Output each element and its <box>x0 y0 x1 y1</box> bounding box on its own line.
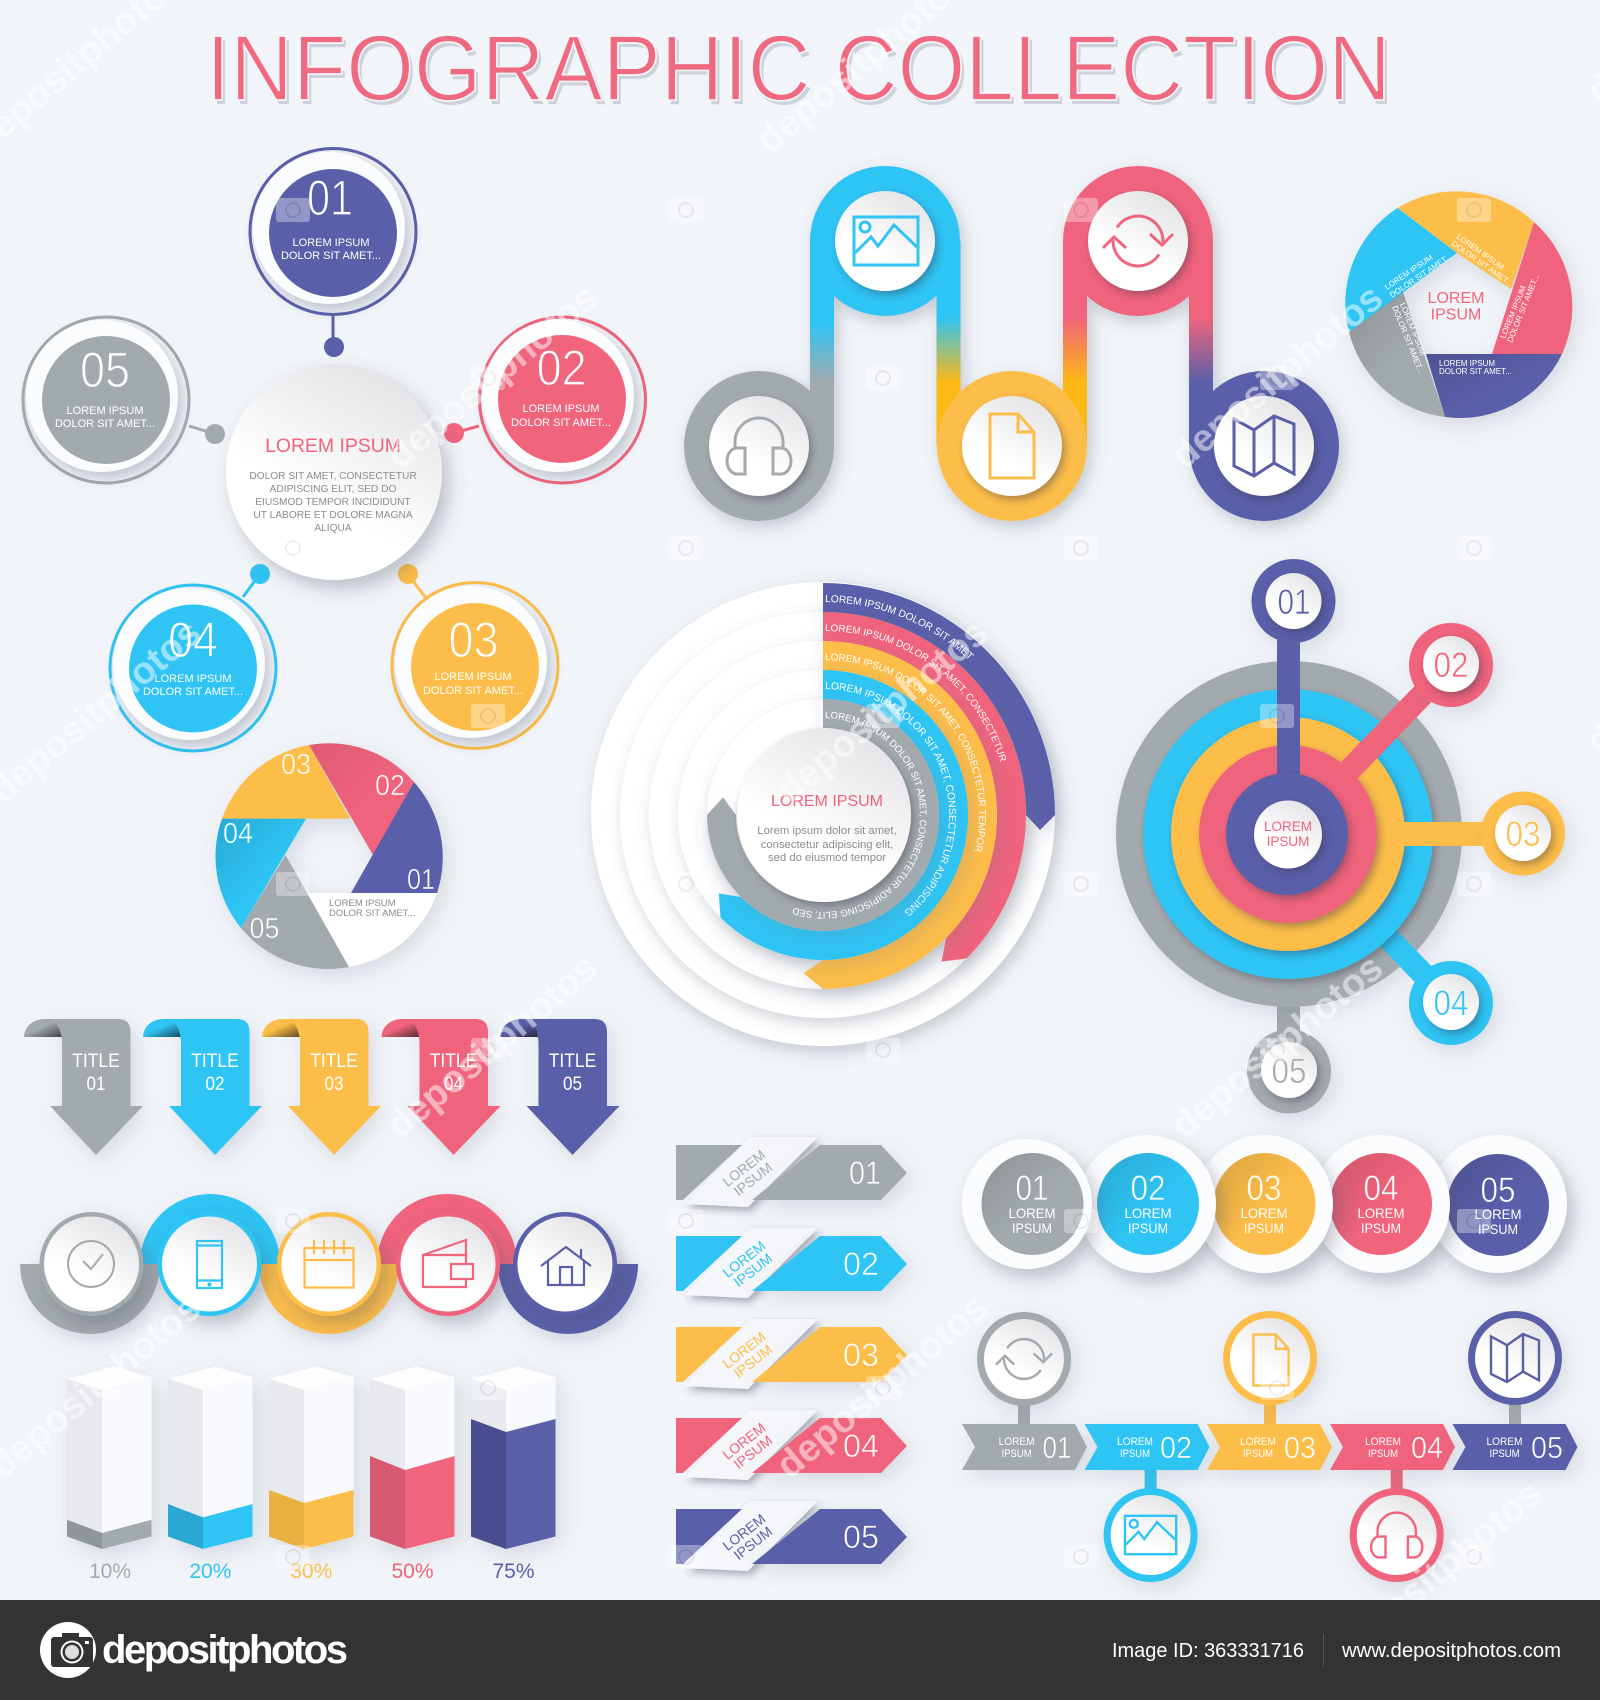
panel: aperture pie chart: DOLOR SIT AMET... <box>329 908 415 919</box>
pink node refresh <box>1088 191 1188 291</box>
chevron 05 <box>1452 1424 1578 1470</box>
panel: target diagram with five nodes <box>1116 559 1565 1114</box>
central circle: UT LABORE ET DOLORE MAGNA <box>253 510 413 521</box>
center label <box>1254 800 1322 868</box>
circle 01 <box>962 1139 1092 1269</box>
panel: pentagon pie chart: LOREM IPSUM <box>1499 284 1528 340</box>
circle 02 <box>1078 1135 1216 1273</box>
step 02 circle: DOLOR SIT AMET... <box>511 417 611 429</box>
ribbon 02: IPSUM <box>731 1250 775 1290</box>
ribbon 02: 02 <box>843 1246 879 1282</box>
step 04 circle: DOLOR SIT AMET... <box>143 686 243 698</box>
circle 04 <box>1312 1135 1450 1273</box>
yellow node document <box>962 396 1062 496</box>
cyan arc: LOREM IPSUM DOLOR SIT AMET, CONSECTETUR ADIPISCING <box>826 682 956 916</box>
chevron 01 <box>962 1424 1087 1470</box>
ribbon 01: LOREM <box>719 1146 768 1190</box>
cyan arc <box>718 670 978 972</box>
arrow 03: TITLE <box>310 1051 358 1072</box>
central circle <box>226 364 442 580</box>
central circle: ALIQUA <box>314 523 352 534</box>
cyan node image <box>835 191 935 291</box>
watermark text: depositphotos <box>769 1287 996 1487</box>
panel: aperture pie chart: 02 <box>375 770 405 802</box>
clock icon circle <box>40 1212 144 1316</box>
arrow 04: TITLE <box>430 1051 477 1072</box>
ribbon 03: IPSUM <box>731 1341 775 1381</box>
central circle: LOREM IPSUM <box>265 435 401 457</box>
pink arc: LOREM IPSUM DOLOR SIT AMET, CONSECTETUR <box>826 624 1006 762</box>
step 03 circle <box>392 564 558 748</box>
step 01 circle: DOLOR SIT AMET... <box>281 250 381 262</box>
panel: linked icon circles <box>20 1194 638 1334</box>
node 05 map <box>1468 1311 1562 1426</box>
ribbon 04: 04 <box>843 1428 879 1464</box>
ribbon 04: IPSUM <box>731 1432 775 1472</box>
yellow arc: LOREM IPSUM DOLOR SIT AMET, CONSECTETUR TEMPOR <box>826 653 986 852</box>
arrow 01: TITLE <box>72 1051 120 1072</box>
panel: pentagon pie chart: DOLOR SIT AMET... <box>1506 273 1541 344</box>
ribbon 04: LOREM <box>719 1419 768 1463</box>
panel: aperture pie chart: LOREM IPSUM <box>329 898 396 909</box>
panel: pentagon pie chart: LOREM IPSUM <box>1455 232 1506 272</box>
cyan layer and node 04: 04 <box>1434 984 1468 1023</box>
arrow 03 <box>262 1019 381 1155</box>
step 04 circle: 04 <box>168 612 218 668</box>
gray node headphones <box>709 396 809 496</box>
ribbon 03: LOREM <box>719 1328 768 1372</box>
circle 03: LOREM <box>1240 1205 1288 1221</box>
house icon circle <box>513 1212 617 1316</box>
step 05 circle: 05 <box>80 342 130 398</box>
chevron 01: LOREM <box>999 1436 1035 1448</box>
ribbon 01 <box>676 1137 907 1207</box>
chevron 02: IPSUM <box>1120 1448 1150 1460</box>
panel: pentagon pie chart: IPSUM <box>1431 306 1481 324</box>
node 03 document <box>1223 1311 1317 1426</box>
arrow 02: TITLE <box>191 1051 239 1072</box>
ribbon 03 <box>676 1319 907 1389</box>
watermark text: depositphotos <box>379 277 606 477</box>
arrow 03: 03 <box>324 1074 344 1095</box>
chevron 01: IPSUM <box>1002 1448 1032 1460</box>
arrow 02 <box>143 1019 262 1155</box>
panel: radial five step diagram <box>23 148 646 751</box>
white stacked discs <box>591 582 1055 1046</box>
title: INFOGRAPHIC COLLECTION <box>209 20 1394 124</box>
circle 01: LOREM <box>1008 1205 1056 1221</box>
central circle: ADIPISCING ELIT, SED DO <box>270 484 396 495</box>
panel: pentagon pie chart: LOREM IPSUM <box>1383 253 1435 292</box>
arrow 01: 01 <box>86 1074 106 1095</box>
step 02 circle <box>444 317 646 483</box>
watermark camera marks <box>276 198 1491 1569</box>
panel: title arrows <box>24 1019 620 1155</box>
panel: overlapping number circles <box>962 1135 1567 1273</box>
circle 04: IPSUM <box>1361 1220 1401 1236</box>
icon: depositphotos logo camera <box>40 1622 96 1678</box>
panel: concentric progress rings <box>588 576 1071 1059</box>
arrow 05: 05 <box>563 1074 582 1095</box>
ribbon 02 <box>676 1228 907 1298</box>
step 03 circle: LOREM IPSUM <box>434 671 512 683</box>
ribbon 05: 05 <box>843 1519 879 1555</box>
arrow 04 <box>382 1019 500 1155</box>
ribbon 05: IPSUM <box>731 1523 775 1563</box>
navy layer and node 01 <box>1226 559 1348 895</box>
chevron 03: LOREM <box>1240 1436 1276 1448</box>
bar 75% <box>471 1367 556 1583</box>
step 05 circle: LOREM IPSUM <box>66 405 144 417</box>
node 01 refresh <box>977 1312 1071 1426</box>
chevron 05: LOREM <box>1486 1436 1522 1448</box>
circle 05: LOREM <box>1474 1206 1522 1222</box>
ribbon 02: LOREM <box>719 1237 768 1281</box>
panel: pentagon pie chart <box>1345 191 1572 418</box>
panel: ribbon tags <box>676 1137 907 1571</box>
circle 03: IPSUM <box>1244 1220 1284 1236</box>
footer image id: Image ID: 363331716 <box>1112 1640 1304 1662</box>
watermark text: depositphotos <box>769 612 996 812</box>
navy node map <box>1214 396 1314 496</box>
panel: pentagon pie chart: LOREM IPSUM <box>1398 301 1428 357</box>
chevron 04: LOREM <box>1365 1436 1401 1448</box>
circle 02: 02 <box>1130 1169 1166 1208</box>
navy arc: LOREM IPSUM DOLOR SIT AMET <box>826 595 974 659</box>
arrow 05 <box>500 1019 620 1155</box>
step 01 circle <box>250 148 416 357</box>
yellow layer and node 03: 03 <box>1506 815 1540 854</box>
chevron 04 <box>1330 1424 1455 1470</box>
step 04 circle <box>110 564 276 751</box>
central circle: DOLOR SIT AMET, CONSECTETUR <box>249 471 417 482</box>
chevron 04: IPSUM <box>1368 1448 1398 1460</box>
circle 02: IPSUM <box>1128 1220 1168 1236</box>
bar 10% <box>67 1367 152 1583</box>
ribbon 03: 03 <box>843 1337 879 1373</box>
circle 05: IPSUM <box>1478 1221 1518 1237</box>
footer bar <box>0 1600 1600 1700</box>
chevron 05: IPSUM <box>1490 1448 1520 1460</box>
chevron 04: 04 <box>1411 1430 1443 1465</box>
panel: pentagon pie chart: LOREM <box>1428 290 1484 307</box>
panel: aperture pie chart: 01 <box>407 864 435 896</box>
node 04 headphones <box>1350 1468 1444 1582</box>
chevron 02: LOREM <box>1117 1436 1153 1448</box>
bar 20% <box>168 1367 252 1583</box>
circle 01: IPSUM <box>1012 1220 1052 1236</box>
chevron 01: 01 <box>1042 1430 1072 1465</box>
step 01 circle: LOREM IPSUM <box>292 237 370 249</box>
arrow 02: 02 <box>206 1074 224 1095</box>
step 03 circle: DOLOR SIT AMET... <box>423 685 523 697</box>
center disc: Lorem ipsum dolor sit amet, <box>757 825 897 837</box>
chevron 03: IPSUM <box>1243 1448 1273 1460</box>
pink layer and node 02: 02 <box>1434 646 1468 685</box>
calendar icon circle <box>277 1212 381 1316</box>
center disc: consectetur adipiscing elit, <box>761 839 893 851</box>
panel: snake path with icons <box>684 166 1339 521</box>
chevron 03: 03 <box>1284 1430 1316 1465</box>
navy layer and node 01: 01 <box>1278 583 1310 622</box>
arrow 04: 04 <box>444 1074 463 1095</box>
step 03 circle: 03 <box>448 612 498 668</box>
bar 50% <box>370 1367 454 1583</box>
arrow 05: TITLE <box>549 1051 596 1072</box>
circle 05 <box>1429 1135 1567 1273</box>
bar 30%: 30% <box>290 1560 332 1583</box>
watermark text: depositphotos <box>379 947 606 1147</box>
ribbon 01: 01 <box>849 1155 881 1191</box>
chevron 05: 05 <box>1531 1430 1563 1465</box>
gray arc <box>707 699 950 940</box>
gray layer and node 05: 05 <box>1272 1052 1306 1091</box>
yellow layer and node 03 <box>1171 717 1565 951</box>
circle 02: LOREM <box>1124 1205 1172 1221</box>
bar 20%: 20% <box>189 1560 231 1583</box>
center label: IPSUM <box>1267 834 1309 849</box>
node 02 image <box>1104 1468 1198 1582</box>
chevron 03 <box>1207 1424 1332 1470</box>
bar 50%: 50% <box>391 1560 434 1583</box>
step 04 circle: LOREM IPSUM <box>154 673 232 685</box>
panel: pentagon pie chart: DOLOR SIT AMET... <box>1390 304 1426 375</box>
circle 04: 04 <box>1364 1169 1398 1208</box>
circle 01: 01 <box>1016 1169 1048 1208</box>
gray arc: LOREM IPSUM DOLOR SIT AMET, CONSECTETUR ADIPISCING ELIT, SED <box>792 712 927 919</box>
phone icon circle <box>158 1212 262 1316</box>
navy arc <box>823 583 1064 836</box>
bar 10%: 10% <box>89 1560 131 1583</box>
panel: pentagon pie chart: DOLOR SIT AMET... <box>1450 239 1515 288</box>
ribbon 05: LOREM <box>719 1510 768 1554</box>
chevron 02 <box>1084 1424 1210 1470</box>
footer separator <box>1323 1634 1324 1667</box>
step 02 circle: 02 <box>537 340 587 396</box>
ribbon 05 <box>676 1501 907 1571</box>
center disc: sed do eiusmod tempor <box>768 852 886 864</box>
yellow arc <box>804 641 1007 1000</box>
half discs <box>20 1194 638 1334</box>
step 05 circle <box>23 317 225 483</box>
circle 03 <box>1195 1135 1333 1273</box>
circle 03: 03 <box>1246 1169 1282 1208</box>
panel: pentagon pie chart: LOREM IPSUM <box>1439 359 1495 368</box>
ribbon 01: IPSUM <box>731 1159 775 1199</box>
circle 04: LOREM <box>1358 1205 1404 1221</box>
panel: pentagon pie chart: DOLOR SIT AMET... <box>1388 252 1453 300</box>
connected ribbon silhouette <box>684 166 1339 521</box>
pink arc <box>823 612 1036 970</box>
arrow 01 <box>24 1019 143 1155</box>
step 02 circle: LOREM IPSUM <box>522 403 600 415</box>
bar 75%: 75% <box>492 1560 535 1583</box>
panel: pentagon pie chart: DOLOR SIT AMET... <box>1439 367 1512 376</box>
central circle: EIUSMOD TEMPOR INCIDIDUNT <box>255 497 411 508</box>
circle 05: 05 <box>1480 1171 1516 1210</box>
ribbon 04 <box>676 1410 907 1480</box>
center label: LOREM <box>1264 819 1312 834</box>
gray layer and node 05 <box>1116 661 1462 1114</box>
cyan layer and node 04 <box>1143 689 1493 1045</box>
step 05 circle: DOLOR SIT AMET... <box>55 418 155 430</box>
step 01 circle: 01 <box>307 170 353 226</box>
bar 30% <box>269 1367 354 1583</box>
center disc <box>737 728 911 902</box>
footer url: www.depositphotos.com <box>1341 1640 1561 1662</box>
panel: aperture pie chart: 04 <box>223 818 253 850</box>
panel: 3D bar chart <box>67 1367 556 1583</box>
watermark text: depositphotos <box>1323 1473 1550 1673</box>
panel: aperture pie chart: 05 <box>250 913 280 945</box>
watermark text: depositphotos <box>1164 947 1391 1147</box>
wallet icon circle <box>396 1212 500 1316</box>
panel: chevron timeline with icon nodes <box>962 1311 1578 1582</box>
chevron 02: 02 <box>1160 1430 1192 1465</box>
panel: aperture pie chart: 03 <box>281 749 311 781</box>
center disc: LOREM IPSUM <box>771 793 883 810</box>
pink layer and node 02 <box>1199 623 1493 923</box>
footer logo text: depositphotos <box>102 1628 348 1672</box>
watermark text: depositphotos <box>1164 277 1391 477</box>
title: INFOGRAPHIC COLLECTION <box>206 16 1391 120</box>
panel: aperture pie chart <box>215 743 443 969</box>
